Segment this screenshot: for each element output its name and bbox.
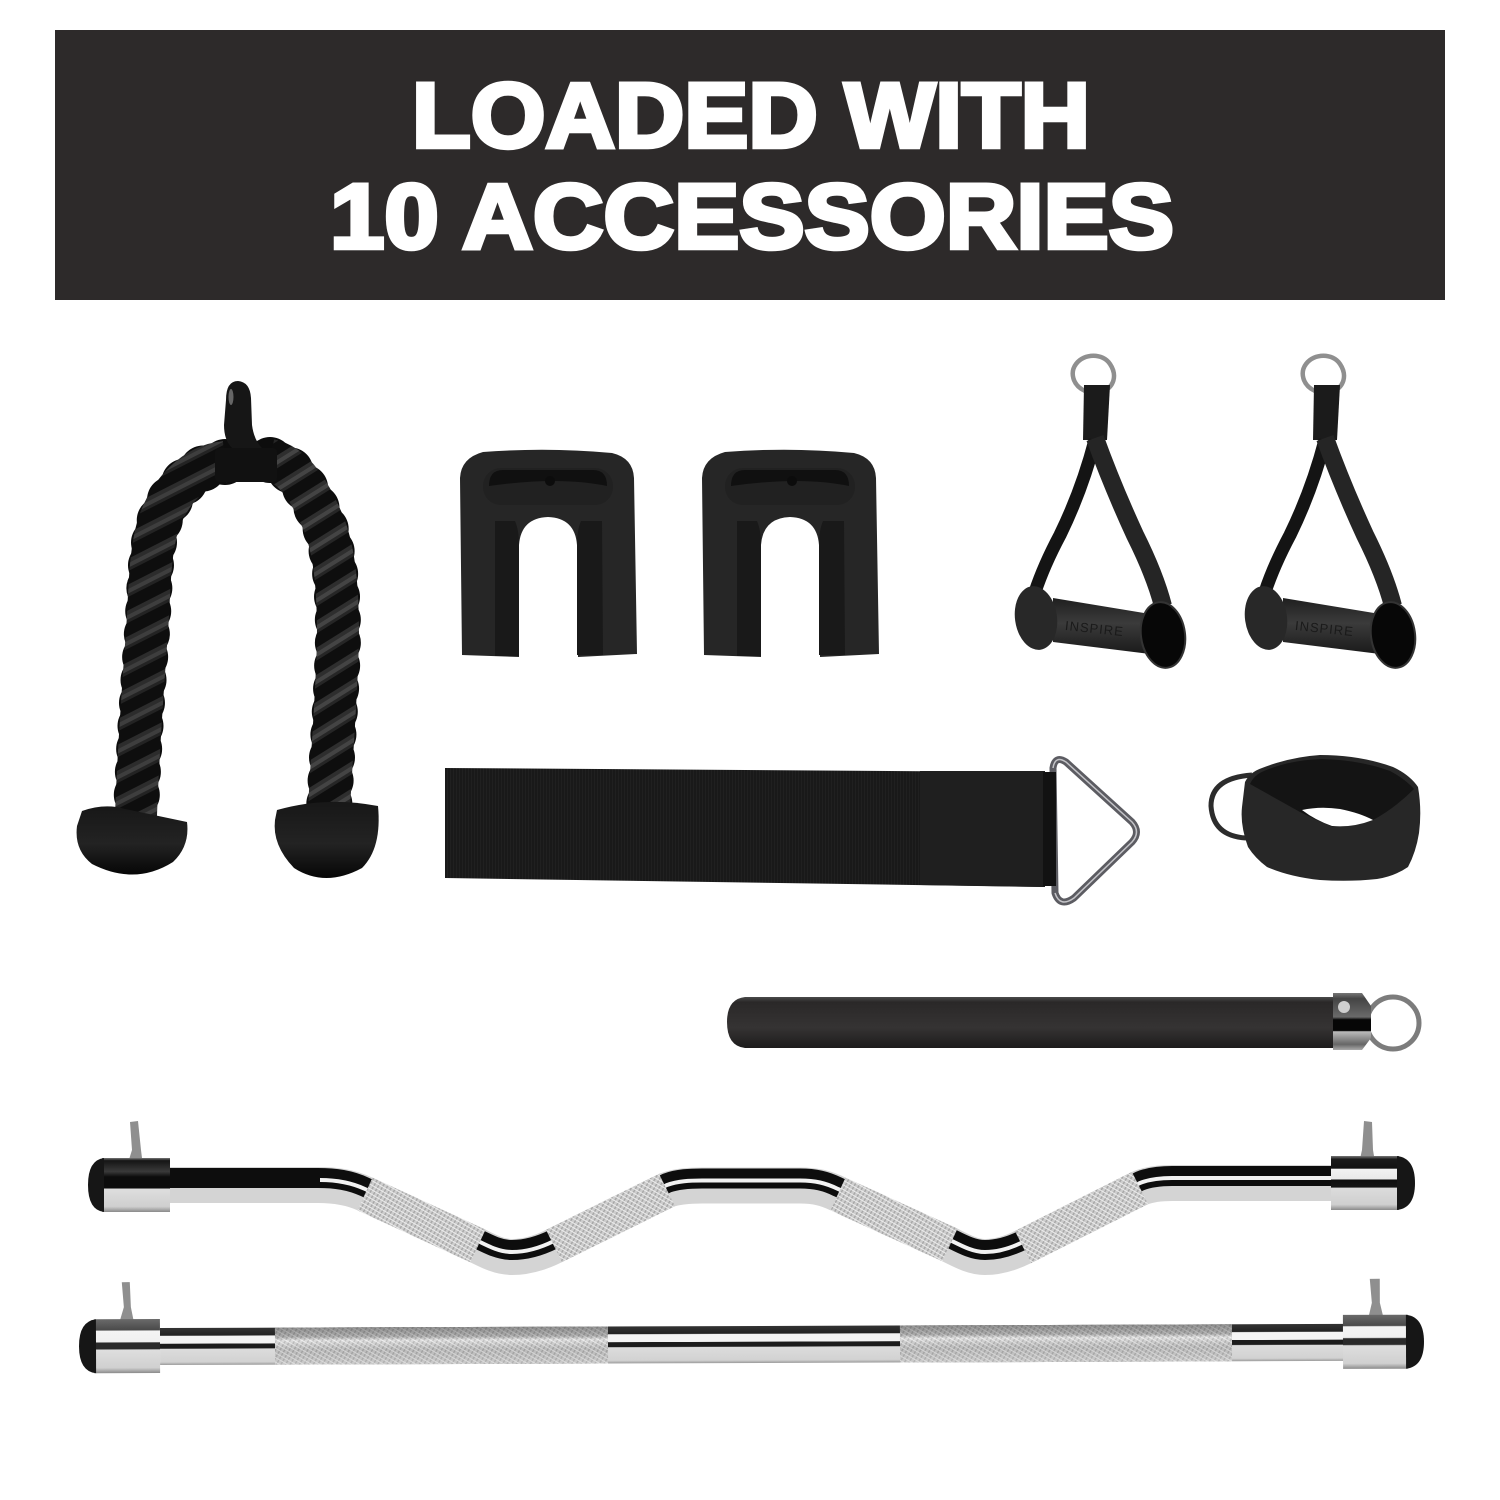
tube dark reflection xyxy=(170,1176,1332,1250)
D ring xyxy=(1303,356,1344,391)
ankle strap xyxy=(1211,755,1420,881)
right clip xyxy=(702,450,879,657)
right cap xyxy=(1406,1315,1424,1369)
left sleeve xyxy=(102,1158,170,1212)
oval recess xyxy=(483,468,613,505)
cable clips xyxy=(460,450,879,657)
metal collar xyxy=(1333,993,1371,1050)
webbing xyxy=(445,768,1045,887)
tube body xyxy=(170,1183,1332,1257)
left end xyxy=(1241,583,1291,653)
heading line 1: LOADED WITH xyxy=(412,65,1090,167)
triangle ring xyxy=(1053,760,1136,902)
right end xyxy=(1367,599,1419,671)
padded bar xyxy=(727,993,1419,1050)
brand mark: INSPIRE xyxy=(1294,618,1355,639)
knurl left xyxy=(275,1326,608,1365)
right end xyxy=(1137,599,1189,671)
right pin xyxy=(1367,1279,1385,1324)
strap tab xyxy=(1083,385,1110,440)
right pin xyxy=(1358,1121,1376,1168)
door anchor strap xyxy=(445,760,1136,902)
brand mark: INSPIRE xyxy=(1064,618,1125,639)
left cap xyxy=(88,1158,104,1212)
knurl right xyxy=(900,1324,1232,1362)
foam tube xyxy=(727,997,1335,1048)
ring xyxy=(1367,997,1419,1049)
channels xyxy=(495,521,603,656)
left end xyxy=(1011,583,1061,653)
cuff opening xyxy=(1302,808,1373,826)
grip xyxy=(1053,598,1150,654)
channels xyxy=(737,521,845,656)
knurled grips xyxy=(365,1188,1140,1247)
hook hole xyxy=(228,389,234,405)
left pin xyxy=(127,1121,143,1166)
hook mount xyxy=(224,381,262,448)
left rope strand xyxy=(136,462,225,815)
left cap xyxy=(79,1319,96,1373)
curl bar xyxy=(88,1121,1415,1257)
rope tricep attachment xyxy=(77,381,379,878)
straight bar xyxy=(79,1278,1424,1373)
grip xyxy=(1283,598,1380,654)
cuff inner shadow xyxy=(1250,759,1414,827)
left sleeve xyxy=(94,1319,160,1373)
right sleeve xyxy=(1343,1315,1408,1369)
triangle highlight xyxy=(1053,760,1136,902)
title banner xyxy=(55,30,1445,300)
strap right side xyxy=(1095,438,1163,606)
strap right side xyxy=(1325,438,1393,606)
D ring xyxy=(1211,775,1252,838)
handle left xyxy=(1011,356,1189,671)
collar logo xyxy=(1338,1001,1350,1013)
tube white reflection xyxy=(320,1178,1332,1252)
collar xyxy=(215,448,277,482)
bar tube xyxy=(160,1324,1350,1365)
left pin xyxy=(118,1282,135,1327)
strap end xyxy=(1043,772,1056,886)
strap left side xyxy=(1035,440,1095,592)
heading line 2: 10 ACCESSORIES xyxy=(330,166,1174,268)
right rubber cap xyxy=(275,802,379,878)
strap left side xyxy=(1265,440,1325,592)
sewn fold xyxy=(920,771,1045,887)
handle right xyxy=(1241,356,1419,671)
right cap xyxy=(1397,1156,1415,1210)
cuff outer xyxy=(1242,755,1420,881)
oval recess xyxy=(725,468,855,505)
D ring xyxy=(1073,356,1114,391)
strap tab xyxy=(1313,385,1340,440)
right sleeve xyxy=(1331,1156,1399,1210)
right rope strand xyxy=(270,460,338,810)
left rubber cap xyxy=(77,806,187,875)
left clip xyxy=(460,450,637,657)
